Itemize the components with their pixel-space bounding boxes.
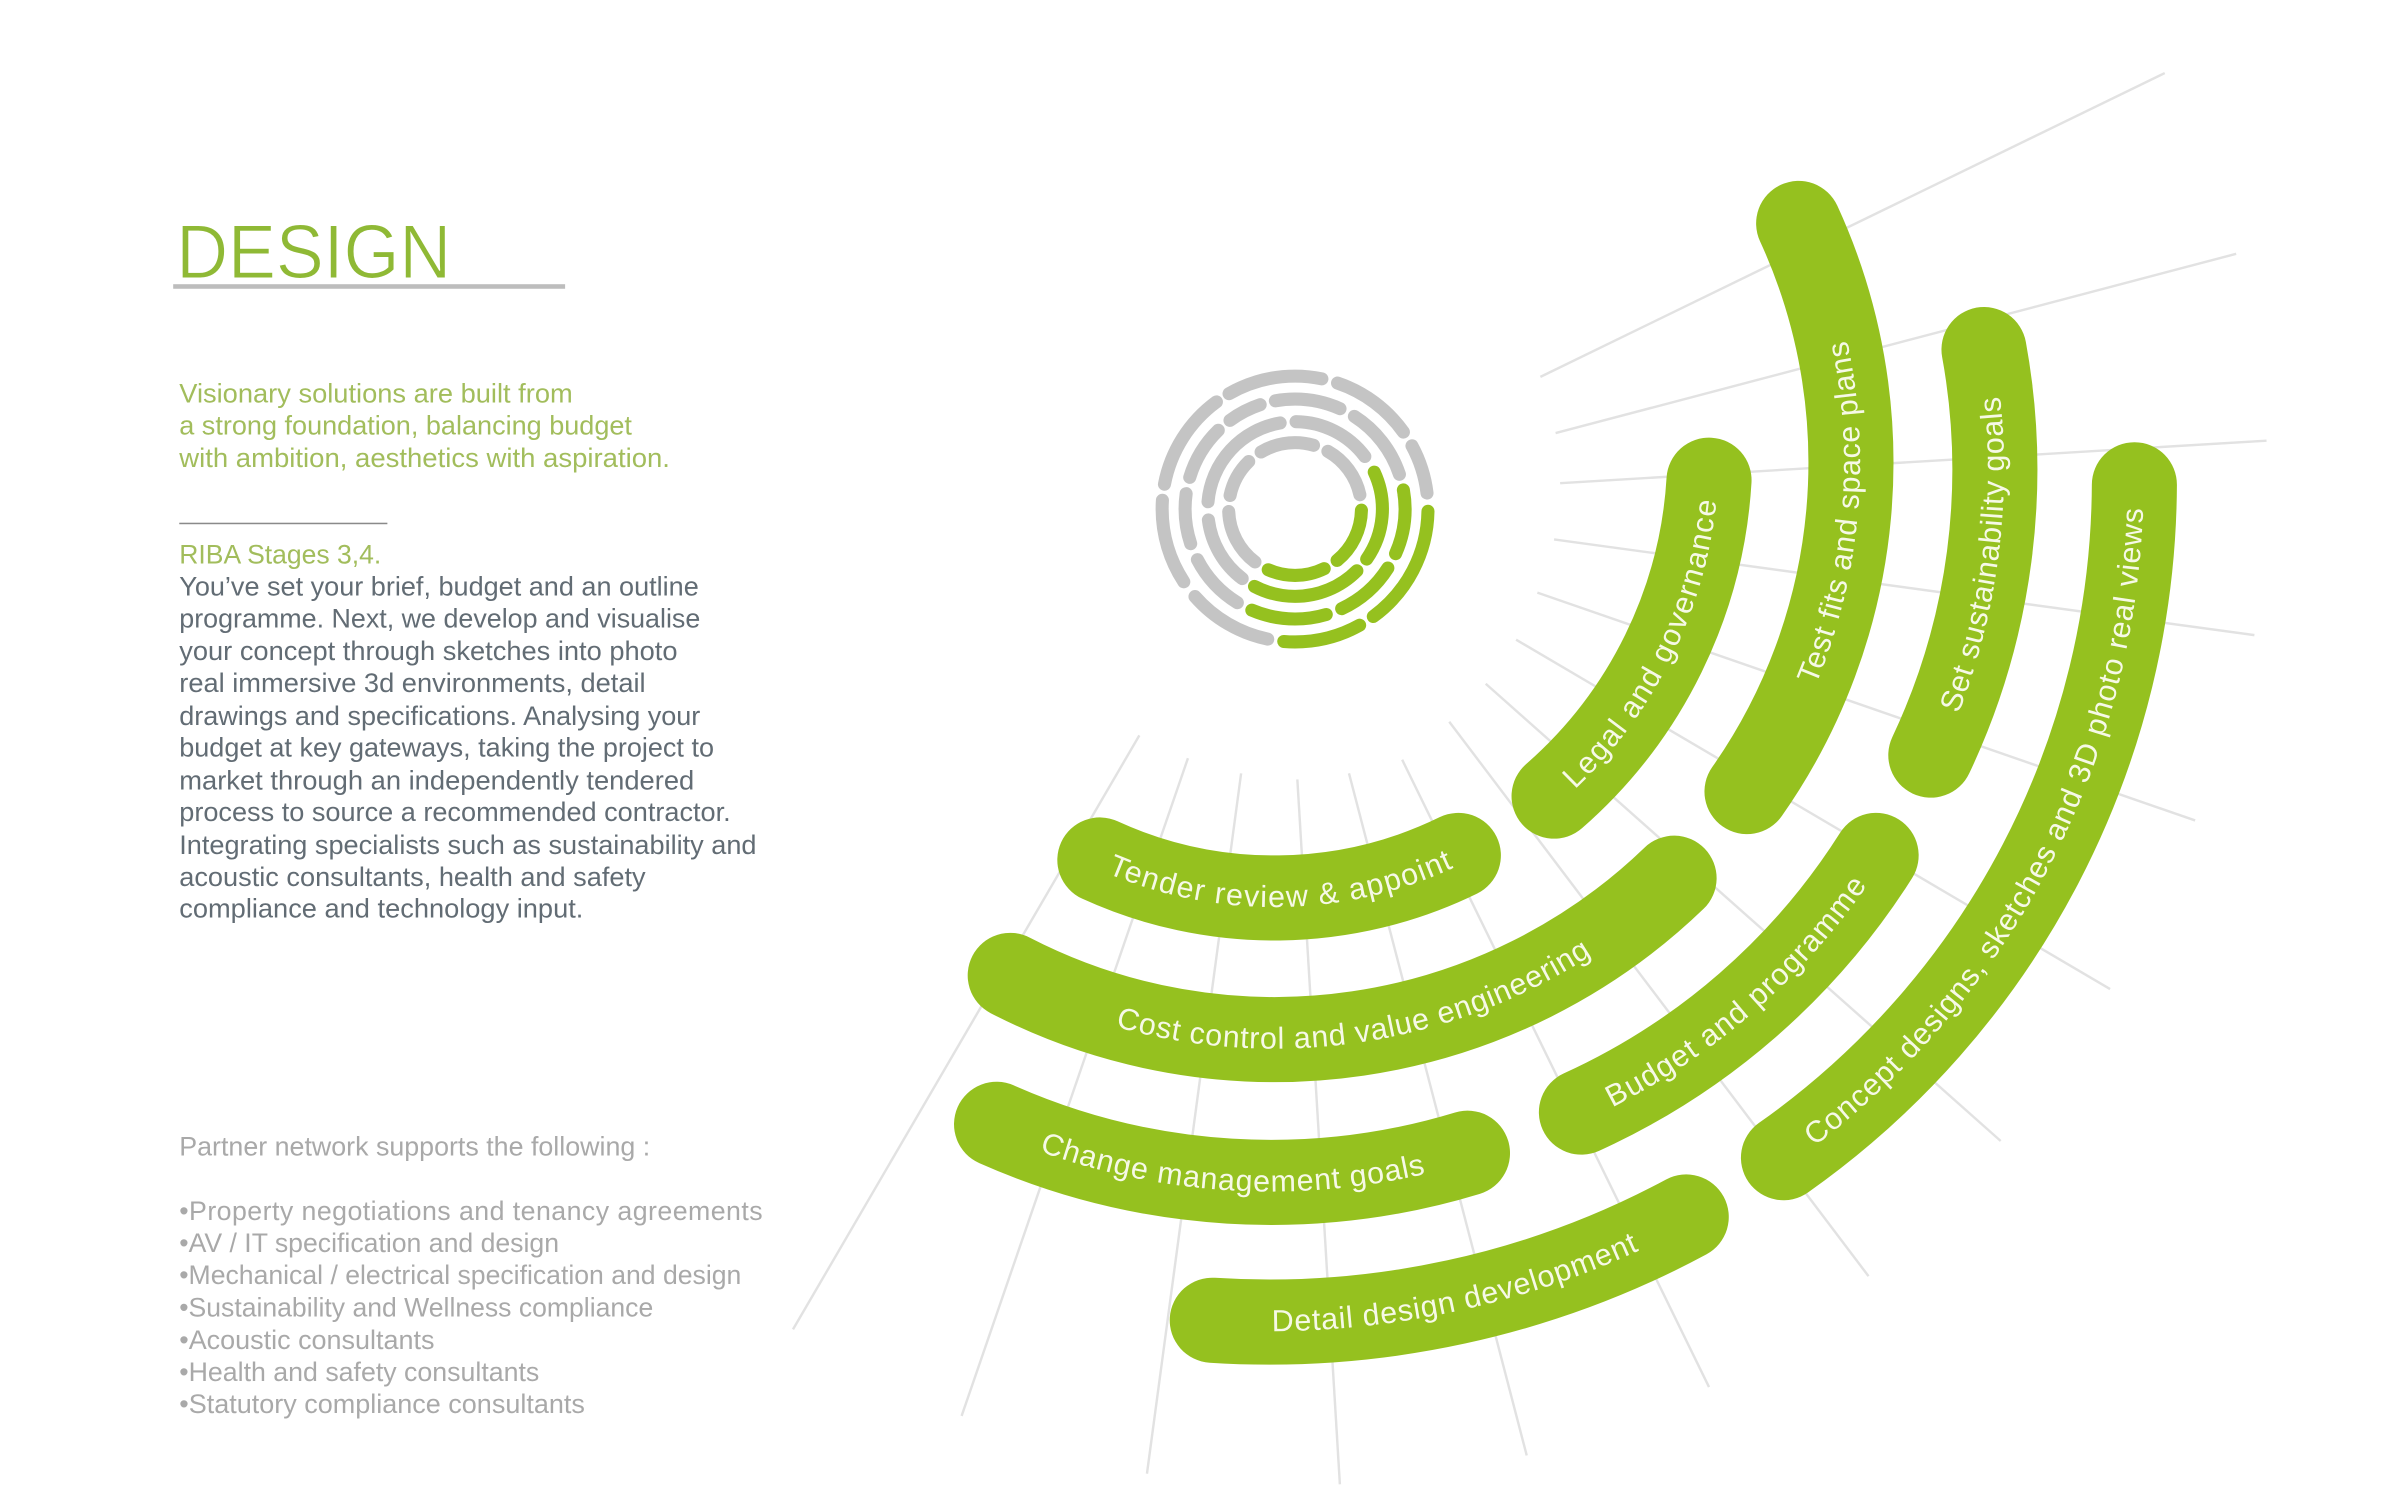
text block: RIBA stages: real immersive 3d environments, detail — [179, 668, 646, 698]
text block: RIBA stages: compliance and technology input. — [179, 894, 583, 924]
tagline text — [178, 378, 670, 473]
text block: RIBA stages: acoustic consultants, health and safety — [179, 862, 646, 892]
text block: partner network: •Sustainability and Wellness compliance — [179, 1292, 653, 1322]
icon: concentric segmented ring logo — [1162, 376, 1428, 642]
text block: partner network: •AV / IT specification and design — [179, 1228, 559, 1258]
arc: Concept designs, sketches and 3D photo real views — [1743, 444, 2177, 1198]
arc: Tender review & appoint: Tender review & appoint — [1114, 851, 1454, 908]
arc: Change management goals — [956, 1084, 1508, 1225]
text block: RIBA stages: RIBA Stages 3,4. — [179, 540, 381, 570]
arc: Cost control and value engineering — [970, 838, 1714, 1082]
text block: partner network: •Mechanical / electrical specification and design — [179, 1260, 741, 1290]
text block: partner network: •Statutory compliance consultants — [179, 1389, 585, 1419]
divider — [179, 523, 387, 524]
text block: RIBA stages: drawings and specifications. Analysing your — [179, 701, 700, 731]
text block: partner network: Partner network supports the following : — [179, 1131, 650, 1161]
text block: partner network — [179, 1131, 763, 1419]
text block: RIBA stages: your concept through sketches into photo — [179, 636, 678, 666]
text block: RIBA stages — [179, 540, 757, 924]
arc: Set sustainability goals: Set sustainability goals — [1941, 398, 2010, 711]
arc: Detail design development — [1172, 1176, 1726, 1365]
arc: Budget and programme: Budget and programme — [1604, 880, 1864, 1106]
text block: partner network: •Property negotiations and tenancy agreements — [179, 1196, 763, 1226]
arc: Detail design development: Detail design development — [1274, 1234, 1639, 1332]
tagline text: Visionary solutions are built from — [179, 378, 573, 408]
arc: Cost control and value engineering: Cost control and value engineering — [1118, 942, 1592, 1049]
tagline text: with ambition, aesthetics with aspiration. — [178, 443, 670, 473]
text block: RIBA stages: process to source a recommended contractor. — [179, 797, 731, 827]
text block: partner network: •Health and safety consultants — [179, 1357, 539, 1387]
tagline text: a strong foundation, balancing budget — [179, 411, 633, 441]
title: DESIGN — [176, 210, 451, 295]
text block: RIBA stages: programme. Next, we develop and visualise — [179, 604, 700, 634]
text block: RIBA stages: Integrating specialists such as sustainability and — [179, 830, 757, 860]
arc: Legal and governance: Legal and governance — [1562, 501, 1716, 788]
radial lines — [793, 73, 2267, 1484]
arc: Budget and programme — [1541, 815, 1916, 1154]
text block: RIBA stages: budget at key gateways, taking the project to — [179, 733, 714, 763]
text block: RIBA stages: market through an independently tendered — [179, 765, 694, 795]
arc: Set sustainability goals — [1890, 310, 2038, 796]
arc: Legal and governance — [1514, 440, 1752, 836]
arc: Change management goals: Change management goals — [1043, 1134, 1424, 1198]
arc: Test fits and space plans — [1707, 183, 1894, 832]
arc: Concept designs, sketches and 3D photo real views: Concept designs, sketches and 3D photo real views — [1806, 509, 2144, 1142]
text block: partner network: •Acoustic consultants — [179, 1325, 434, 1355]
arc: Test fits and space plans: Test fits and space plans — [1796, 342, 1866, 678]
arc: Tender review & appoint — [1060, 812, 1498, 940]
text block: RIBA stages: You’ve set your brief, budget and an outline — [179, 572, 699, 602]
